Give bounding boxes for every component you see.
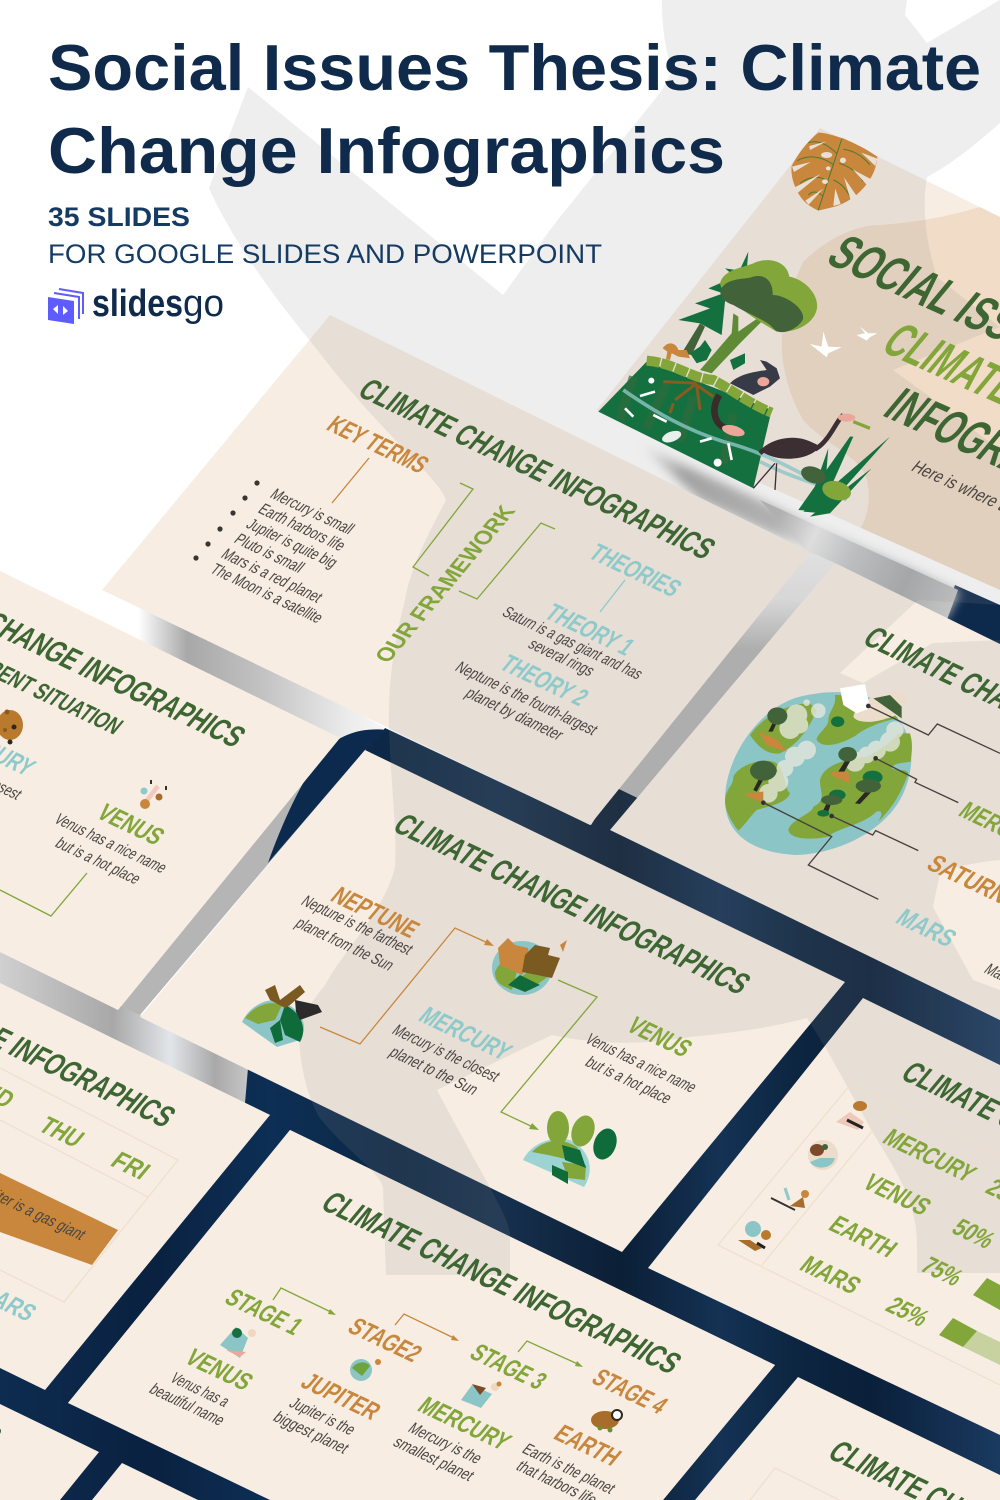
trees bbox=[745, 707, 883, 817]
heading: theories: THEORIES bbox=[583, 539, 687, 602]
heading: key terms: KEY TERMS bbox=[321, 411, 434, 479]
heron bbox=[760, 415, 843, 453]
moss bbox=[647, 361, 772, 413]
page title bbox=[48, 31, 981, 187]
pine tree bbox=[678, 252, 748, 335]
text: venus line 1: Venus has a nice name bbox=[50, 811, 171, 877]
panel: earth slide bbox=[725, 621, 1000, 1014]
label: stage 3: STAGE 3 bbox=[464, 1339, 552, 1395]
grey gutter under cover slide bbox=[640, 445, 960, 620]
label: venus: VENUS bbox=[857, 1169, 937, 1221]
text: mercury line 1: Mercury is the bbox=[404, 1420, 486, 1467]
value: 75 percent: 75% bbox=[915, 1252, 968, 1292]
text: mercury line 2: smallest planet bbox=[389, 1434, 478, 1485]
navy gutter top right bbox=[940, 585, 1000, 650]
label: earth: EARTH bbox=[548, 1420, 626, 1471]
grey gutter crisp band bbox=[760, 500, 958, 625]
tree canopy bbox=[720, 260, 817, 332]
text: venus line 1: Venus has a nice name bbox=[581, 1031, 701, 1096]
icon: asteroid bbox=[0, 710, 23, 744]
page title: Change Infographics bbox=[48, 114, 725, 187]
key terms bullet list: Pluto is small bbox=[230, 531, 308, 576]
key terms bullet list: Earth harbors life bbox=[254, 501, 349, 555]
bones bbox=[625, 392, 732, 460]
icon: trees on globe bbox=[523, 1111, 621, 1187]
panel: weekly schedule slide bbox=[0, 941, 182, 1327]
icon: stage 3 bbox=[461, 1382, 502, 1408]
tree trunk bbox=[700, 313, 763, 373]
panel: timeline slide bbox=[242, 808, 757, 1187]
text: venus line 2: but is a hot place bbox=[51, 835, 144, 888]
label: jupiter: JUPITER bbox=[295, 1368, 387, 1426]
label: mercury: MERCURY bbox=[412, 1392, 517, 1456]
panel: current situation slide bbox=[0, 561, 252, 916]
text: theory 1 line 2: several rings bbox=[524, 636, 598, 680]
value: 25 percent: 25% bbox=[880, 1292, 935, 1332]
slide count: 35 SLIDES bbox=[48, 202, 190, 232]
icon: burnt trees on globe bbox=[242, 985, 322, 1047]
heading: our framework: OUR FRAMEWORK bbox=[370, 502, 521, 666]
label: venus: VENUS bbox=[621, 1012, 698, 1063]
bar: row four bbox=[939, 1318, 1000, 1365]
key terms bullet list: Jupiter is quite big bbox=[242, 516, 341, 572]
text: neptune line 1: Neptune is the farthest bbox=[297, 893, 417, 958]
roots bbox=[663, 382, 713, 413]
label: mars: MARS bbox=[794, 1251, 867, 1300]
label: venus: VENUS bbox=[179, 1344, 259, 1396]
reeds bbox=[798, 437, 890, 517]
orange bar bbox=[0, 1173, 118, 1265]
page title: Social Issues Thesis: Climate bbox=[48, 31, 981, 104]
table grid bbox=[0, 1068, 178, 1302]
label: stage 2: STAGE2 bbox=[342, 1313, 427, 1368]
text: venus line 2: but is a hot place bbox=[581, 1054, 676, 1107]
navy crescent bbox=[268, 729, 388, 863]
grey gutter between framework and situation slides bbox=[0, 570, 385, 750]
key terms bullet list bbox=[193, 480, 358, 627]
smoke clouds bbox=[759, 699, 904, 803]
wordmark suffix: go bbox=[183, 283, 224, 325]
icon: fire on globe bbox=[492, 938, 567, 995]
connector: venus bbox=[0, 873, 87, 916]
lighter leaf highlight bbox=[550, 127, 612, 228]
grey gutter lower left bbox=[0, 952, 248, 1103]
arrow: green bbox=[501, 980, 597, 1130]
key terms bullet list: Mercury is small bbox=[266, 486, 358, 538]
navy gutters behind slides bbox=[0, 728, 1000, 1500]
large translucent background shape bbox=[209, 0, 1000, 1275]
table grid bbox=[718, 1085, 1000, 1385]
label: mercury: MERCURY bbox=[877, 1124, 982, 1188]
platforms subtitle: FOR GOOGLE SLIDES AND POWERPOINT bbox=[48, 239, 602, 269]
label: venus: VENUS bbox=[91, 799, 170, 851]
bracket: left bbox=[413, 483, 473, 576]
ground bbox=[598, 362, 772, 488]
leader lines bbox=[763, 706, 1000, 899]
key terms bullet list: Mars is a red planet bbox=[217, 546, 326, 606]
text: theory 2 line 1: Neptune is the fourth-largest bbox=[451, 659, 602, 739]
text: venus line 2: beautiful name bbox=[145, 1381, 229, 1429]
icon: stage 1 bbox=[220, 1327, 256, 1358]
arrow: orange bbox=[320, 928, 494, 1044]
table grid bbox=[750, 1468, 1000, 1500]
column label: fri: FRI bbox=[105, 1147, 156, 1185]
text: theory 1 line 1: Saturn is a gas giant and has bbox=[498, 604, 646, 683]
grey gutter left of centre slide bbox=[118, 738, 365, 1015]
label: stage 1: STAGE 1 bbox=[219, 1284, 308, 1341]
icon: stage 2 bbox=[350, 1359, 381, 1381]
illustration: earth globe bbox=[725, 684, 1000, 899]
cover slide peach blob bbox=[782, 200, 1000, 610]
text: jupiter line 1: Jupiter is the bbox=[285, 1395, 359, 1439]
heading: theory 2: THEORY 2 bbox=[494, 650, 594, 712]
panel: stages slide bbox=[145, 1186, 688, 1500]
lily leaves bbox=[799, 463, 828, 487]
icon: stacked slides bbox=[48, 289, 83, 324]
icons: row icons bbox=[738, 1101, 867, 1251]
text: jupiter line 2: biggest planet bbox=[269, 1409, 353, 1457]
panel: bottom right slide bbox=[750, 1435, 1000, 1500]
slide title: CLIMATE CHANGE INFOGRAPHICS bbox=[386, 808, 757, 1001]
bracket: right bbox=[459, 523, 555, 599]
connector: key terms bbox=[332, 458, 369, 503]
logo: slidesgo bbox=[48, 283, 224, 325]
text: venus line 1: Venus has a bbox=[166, 1370, 233, 1411]
rabbit bbox=[730, 360, 780, 395]
connector: theories bbox=[600, 580, 625, 612]
wordmark: slides bbox=[92, 283, 183, 325]
icon: monstera leaf bbox=[791, 133, 877, 211]
slide title: CLIMATE CHANGE INFOGRAPHICS bbox=[351, 373, 722, 566]
mushrooms bbox=[663, 343, 690, 360]
grey gutter between framework and earth slides bbox=[615, 552, 835, 800]
text: mercury line 2: planet to the Sun bbox=[385, 1044, 482, 1099]
icon: stage 4 bbox=[591, 1410, 622, 1432]
polar cap and bear bbox=[853, 690, 907, 722]
panel: cover slide bbox=[598, 133, 1000, 576]
birds bbox=[810, 332, 842, 357]
column label: thu: THU bbox=[33, 1112, 89, 1153]
label: earth: EARTH bbox=[823, 1211, 903, 1263]
label: mercury: MERCURY bbox=[413, 1002, 518, 1066]
bar: row three bbox=[973, 1278, 1000, 1310]
label: stage 4: STAGE 4 bbox=[586, 1364, 673, 1420]
text: theory 2 line 2: planet by diameter bbox=[461, 685, 567, 744]
arrows between stages bbox=[273, 1288, 583, 1367]
icon: thermometer bbox=[140, 780, 166, 809]
text: mercury line 1: Mercury is the closest bbox=[388, 1022, 504, 1086]
label: neptune: NEPTUNE bbox=[325, 882, 425, 944]
panel: our framework slide bbox=[193, 373, 722, 744]
label: mars: MARS bbox=[890, 904, 962, 952]
burrow and mole bbox=[714, 395, 727, 428]
text: neptune line 2: planet from the Sun bbox=[291, 915, 398, 974]
heading: theory 1: THEORY 1 bbox=[539, 599, 640, 661]
plants bbox=[690, 340, 745, 370]
illustration: forest and wildlife bbox=[598, 252, 890, 517]
panel: percentages slide bbox=[718, 1056, 1000, 1385]
slide title: CLIMATE CHANGE INFOGRAPHICS bbox=[314, 1186, 688, 1380]
river bbox=[623, 390, 847, 500]
key terms bullet list: The Moon is a satellite bbox=[206, 561, 327, 627]
